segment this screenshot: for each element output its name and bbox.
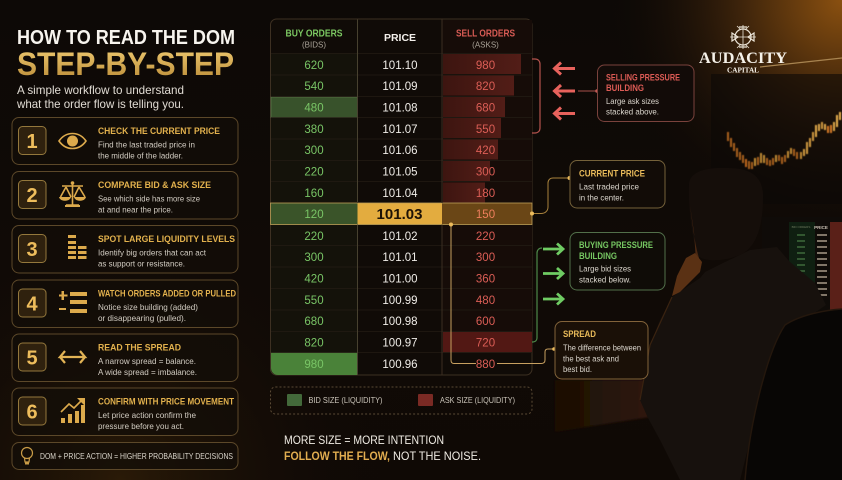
prices: 101.07: [382, 124, 418, 136]
prices: 100.96: [382, 359, 418, 371]
desk glow: [555, 380, 700, 432]
panel: step 6: pressure before you act.: [98, 421, 184, 431]
panel: step 5: A wide spread = imbalance.: [98, 367, 197, 377]
ask sizes: 220: [476, 231, 495, 243]
ask sizes: 980: [476, 60, 495, 72]
person silhouette: [640, 168, 826, 480]
prices: 100.99: [382, 295, 418, 307]
arrows: buying pressure: [543, 244, 563, 304]
ask depth bars: [443, 54, 521, 202]
closing message: MORE SIZE = MORE INTENTION: [284, 433, 444, 447]
callout: current price: [530, 160, 665, 216]
table headers: PRICE: [384, 32, 416, 44]
panel: takeaway: [12, 442, 238, 470]
panel: step 6: Let price action confirm the: [98, 410, 196, 420]
second monitor with mini ladder: PRICE: [814, 225, 828, 230]
subtitle: what the order flow is telling you.: [16, 97, 184, 111]
subtitle: [16, 83, 184, 111]
bid sizes: 380: [304, 124, 324, 136]
prices: 101.04: [382, 188, 418, 200]
prices: 100.97: [382, 338, 418, 350]
subtitle: A simple workflow to understand: [17, 83, 184, 97]
prices: 101.03: [377, 206, 422, 223]
bid sizes: 980: [304, 359, 324, 371]
ask sizes: 550: [476, 124, 495, 136]
panel: step 3: 3: [26, 239, 38, 261]
icon: logo emblem: [730, 25, 756, 49]
panel: step 1: [12, 118, 238, 164]
ask sizes: [476, 60, 495, 371]
prices: 101.02: [382, 231, 418, 243]
callout: buying pressure: BUYING PRESSURE: [579, 240, 653, 250]
panel: step 2: 2: [26, 185, 38, 207]
bid sizes: 680: [304, 316, 324, 328]
callout: buying pressure: Large bid sizes: [579, 264, 631, 274]
heading: step-by-step: STEP-BY-STEP: [17, 46, 234, 82]
panel: step 6: CONFIRM WITH PRICE MOVEMENT: [98, 396, 234, 408]
prices: 100.98: [382, 316, 418, 328]
callout: buying pressure: stacked below.: [579, 274, 631, 284]
callout: selling pressure: stacked above.: [606, 106, 659, 116]
buying pressure bracket: [532, 248, 542, 342]
panel: step 2: COMPARE BID & ASK SIZE: [98, 180, 211, 191]
legend: ASK SIZE (LIQUIDITY): [440, 396, 515, 405]
panel: step 3: as support or resistance.: [98, 258, 185, 268]
ask sizes: 880: [476, 359, 495, 371]
panel: step 4: 4: [26, 294, 38, 316]
second monitor with mini ladder: [762, 217, 842, 312]
bid sizes: 420: [304, 274, 324, 286]
column tints: [271, 53, 357, 353]
table headers: SELL ORDERS: [456, 28, 515, 40]
callout: buying pressure: BUILDING: [579, 251, 617, 261]
callout: selling pressure: BUILDING: [606, 83, 644, 93]
prices: 101.06: [382, 145, 418, 157]
row highlights: [271, 97, 358, 118]
panel: step 1: Find the last traded price in: [98, 140, 195, 150]
icon: plus minus lines: [59, 291, 87, 313]
callout: selling pressure: SELLING PRESSURE: [606, 72, 680, 82]
chair: [745, 309, 842, 480]
ask sizes: 180: [476, 188, 495, 200]
panel: step 5: A narrow spread = balance.: [98, 356, 196, 366]
candlestick chart: [727, 112, 841, 169]
legend: [270, 387, 532, 414]
callout: spread: The difference between: [563, 342, 641, 352]
callout: spread: best bid.: [563, 364, 592, 374]
prices: [377, 60, 422, 371]
callout: current price: Last traded price: [579, 182, 639, 192]
panel: step 4: Notice size building (added): [98, 302, 198, 312]
ask sizes: 360: [476, 274, 495, 286]
title: HOW TO READ THE DOM: [17, 27, 235, 49]
icon: light bulb: [22, 448, 32, 464]
ask sizes: 600: [476, 316, 495, 328]
logo: Audacity Capital: AUDACITY: [699, 50, 787, 67]
prices: 101.09: [382, 81, 418, 93]
prices: 101.00: [382, 274, 418, 286]
table headers: [286, 28, 515, 50]
second monitor with mini ladder: BID ORDERS: [792, 225, 810, 229]
ask sizes: 300: [476, 166, 495, 178]
bid sizes: 120: [304, 209, 324, 221]
bid sizes: 220: [304, 231, 324, 243]
callout: selling pressure: [578, 65, 694, 122]
bid sizes: 220: [304, 166, 324, 178]
bid sizes: 620: [304, 60, 324, 72]
closing message: [284, 433, 481, 463]
table headers: BUY ORDERS: [286, 28, 343, 40]
prices: 101.05: [382, 166, 418, 178]
callout: current price: in the center.: [579, 192, 624, 202]
panel: step 3: [12, 226, 238, 273]
table headers: (ASKS): [472, 40, 499, 50]
logo: Audacity Capital: CAPITAL: [727, 68, 759, 74]
bid sizes: 300: [304, 252, 324, 264]
callout: buying pressure: [570, 232, 665, 290]
ask sizes: 420: [476, 145, 495, 157]
ask sizes: 480: [476, 295, 495, 307]
logo: Audacity Capital: [699, 25, 787, 74]
panel: step 4: or disappearing (pulled).: [98, 313, 186, 323]
callout: spread: SPREAD: [563, 329, 596, 339]
prices: 101.01: [382, 252, 418, 264]
callout: spread: [449, 222, 648, 379]
current price row: [271, 203, 358, 224]
panel: step 5: 5: [26, 348, 38, 370]
arrows: selling pressure: [554, 62, 575, 120]
bid sizes: 540: [304, 81, 324, 93]
panel: step 5: [12, 334, 238, 382]
prices: 101.10: [382, 60, 418, 72]
grid lines: [271, 54, 532, 352]
panel: step 6: 6: [26, 402, 38, 424]
callout: spread: the best ask and: [563, 354, 619, 364]
bid sizes: 300: [304, 145, 324, 157]
prices: 101.08: [382, 102, 418, 114]
panel: step 2: at and near the price.: [98, 204, 173, 214]
bid sizes: 480: [304, 102, 324, 114]
panel: takeaway: DOM + PRICE ACTION = HIGHER PROBABILITY DECISIONS: [40, 451, 233, 461]
selling pressure bracket: [532, 59, 540, 133]
icon: eye: [59, 134, 86, 148]
closing message: FOLLOW THE FLOW,: [284, 449, 390, 463]
bid sizes: 820: [304, 338, 324, 350]
panel: step 4: [12, 280, 238, 328]
title: [17, 27, 235, 82]
order ladder table: [270, 19, 532, 375]
ask sizes: 720: [476, 338, 495, 350]
ask sizes: 680: [476, 102, 495, 114]
chart monitor backdrop: [711, 58, 842, 204]
panel: step 4: WATCH ORDERS ADDED OR PULLED: [98, 288, 236, 300]
table headers: (BIDS): [302, 40, 326, 50]
panel: step 1: CHECK THE CURRENT PRICE: [98, 126, 220, 137]
legend: BID SIZE (LIQUIDITY): [308, 396, 383, 405]
icon: liquidity stack: [68, 235, 86, 259]
panel: step 2: See which side has more size: [98, 194, 200, 204]
panel: step 2: [12, 172, 238, 219]
ask sizes: 150: [476, 209, 495, 221]
panel: step 1: the middle of the ladder.: [98, 150, 183, 160]
panel: step 3: SPOT LARGE LIQUIDITY LEVELS: [98, 234, 235, 245]
ask sizes: 300: [476, 252, 495, 264]
icon: rising chart: [61, 398, 85, 423]
icon: scales: [59, 181, 86, 207]
bid sizes: 550: [304, 295, 324, 307]
panel: step 3: Identify big orders that can act: [98, 248, 207, 258]
ask sizes: 820: [476, 81, 495, 93]
panel: step 5: READ THE SPREAD: [98, 342, 181, 354]
icon: double arrow: [60, 351, 85, 363]
panel: step 6: [12, 388, 238, 436]
bid sizes: [304, 60, 324, 371]
callout: current price: CURRENT PRICE: [579, 168, 645, 178]
bid sizes: 160: [304, 188, 324, 200]
callout: selling pressure: Large ask sizes: [606, 96, 659, 106]
closing message: NOT THE NOISE.: [393, 449, 481, 463]
panel: step 1: 1: [26, 131, 38, 153]
